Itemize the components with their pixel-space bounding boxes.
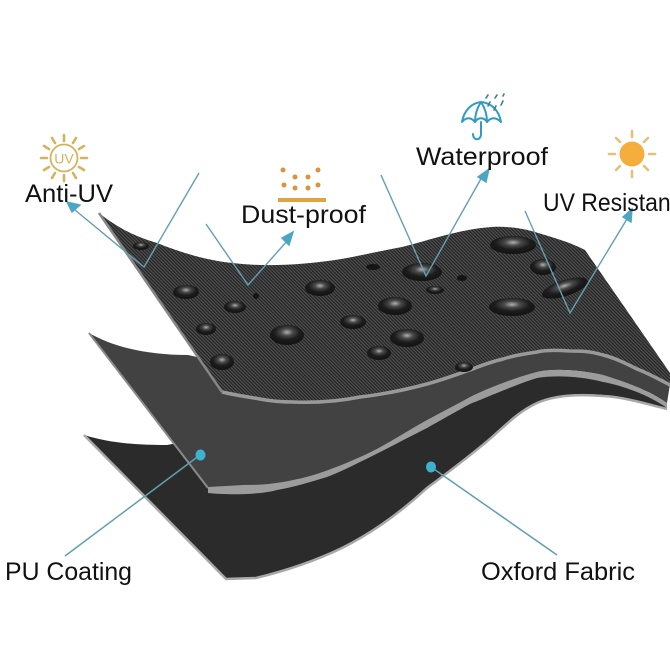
icon: orange sun bbox=[609, 131, 655, 177]
water droplets bbox=[133, 236, 590, 372]
icon: umbrella with rain bbox=[462, 94, 504, 139]
icon: UV sun bbox=[41, 135, 87, 181]
icon: UV sun: UV bbox=[54, 150, 74, 166]
label: Oxford Fabric: Oxford Fabric bbox=[481, 558, 635, 586]
reflection arrow: Waterproof bbox=[381, 169, 489, 276]
layer: top waterproof fabric bbox=[99, 213, 670, 402]
leader line: PU Coating bbox=[65, 450, 206, 556]
icon: dust bbox=[278, 168, 326, 202]
label: Anti-UV: Anti-UV bbox=[25, 180, 113, 208]
reflection arrow: Dust-proof bbox=[206, 224, 293, 285]
leader line: Oxford Fabric bbox=[426, 462, 557, 555]
reflection arrow: Anti-UV bbox=[67, 173, 199, 267]
layer: PU coating bbox=[89, 333, 670, 494]
reflection arrow: UV Resistance bbox=[525, 209, 632, 313]
label: Waterproof: Waterproof bbox=[416, 143, 548, 171]
label: Dust-proof: Dust-proof bbox=[241, 201, 366, 229]
layer: oxford fabric bbox=[84, 372, 667, 579]
label: PU Coating: PU Coating bbox=[5, 558, 132, 586]
